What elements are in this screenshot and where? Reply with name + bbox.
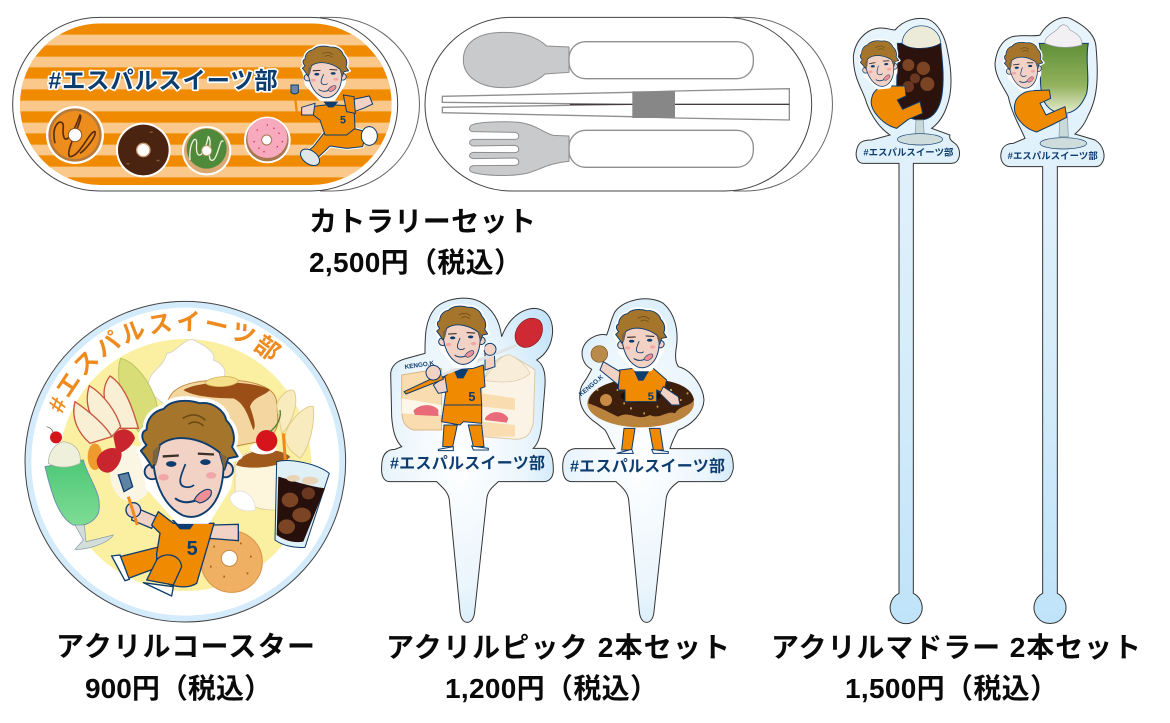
illustration: pancakes [168, 377, 278, 447]
case back outline [733, 17, 832, 191]
panel: cutlery case interior [425, 17, 832, 191]
illustration: player hugging glass [1002, 40, 1067, 132]
coaster curved title: #エスパルスイーツ部 [49, 310, 282, 414]
icon: chocolate donut [116, 123, 171, 177]
muddler label: #エスパルスイーツ部 [1008, 150, 1098, 161]
case title: #エスパルスイーツ部 [48, 68, 278, 94]
case front outline [13, 17, 398, 191]
illustration: seated player: 5 [187, 538, 198, 560]
pick outline [563, 299, 733, 622]
icon: spoon [463, 32, 753, 88]
illustration: player with fork [404, 305, 543, 451]
label: cutlery set [309, 206, 536, 278]
panel: cake acrylic pick [382, 298, 553, 622]
icon: fork [469, 122, 753, 176]
label: acrylic picks [386, 632, 730, 704]
panel: cutlery case lid [13, 17, 419, 191]
muddler outline [853, 18, 959, 624]
illustration: player in donut float: 5 [648, 391, 654, 403]
label: acrylic picks: アクリルピック 2本セット [386, 632, 730, 663]
yellow backdrop [59, 339, 311, 591]
illustration: seated player [112, 399, 240, 596]
coaster disc [25, 301, 346, 622]
panel: donut acrylic pick [563, 299, 733, 622]
illustration: strawberry shortcake [402, 355, 535, 439]
pick label: #エスパルスイーツ部 [570, 457, 725, 475]
icon: chopsticks [442, 89, 789, 120]
label: acrylic muddlers: アクリルマドラー 2本セット [771, 632, 1141, 663]
icon: caramel donut [46, 106, 104, 164]
icon: strawberry donut [244, 117, 291, 163]
pick outline [382, 298, 553, 622]
illustration: whipped cream [148, 340, 225, 403]
panel: acrylic coaster [24, 300, 346, 622]
illustration: melon and apple slices [74, 358, 157, 502]
illustration: bagel donut [201, 531, 262, 592]
illustration: player in donut float: KENGO.K [578, 374, 605, 398]
muddler outline [995, 18, 1104, 624]
illustration: bananas [277, 390, 314, 458]
illustration: pudding with cherry [230, 410, 290, 511]
label: acrylic coaster: アクリルコースター [56, 631, 315, 662]
panel: muddler matcha float [995, 18, 1104, 624]
case front outline [425, 17, 812, 191]
illustration: running player: 5 [340, 114, 346, 126]
illustration: running player [291, 45, 377, 169]
illustration: cream soda [45, 427, 113, 549]
label: cutlery set: カトラリーセット [309, 206, 536, 237]
label: acrylic picks: 1,200円（税込） [445, 673, 658, 704]
label: acrylic coaster: 900円（税込） [85, 673, 272, 704]
illustration: player in donut float [578, 309, 694, 453]
illustration: matcha float glass [1039, 25, 1088, 149]
illustration: player with fork: KENGO.K [404, 360, 435, 371]
pick label: #エスパルスイーツ部 [390, 454, 545, 472]
illustration: player with fork: 5 [468, 390, 475, 404]
orange striped background [20, 23, 392, 185]
panel: muddler coffee float [853, 18, 959, 624]
label: cutlery set: 2,500円（税込） [309, 247, 522, 278]
icon: matcha donut [182, 126, 231, 175]
label: acrylic coaster [56, 631, 315, 704]
label: acrylic muddlers [771, 632, 1141, 704]
muddler label: #エスパルスイーツ部 [863, 147, 954, 158]
illustration: coffee float glass [897, 26, 943, 145]
case back outline [320, 17, 419, 191]
label: acrylic muddlers: 1,500円（税込） [845, 673, 1058, 704]
illustration: player hugging glass [857, 38, 923, 128]
illustration: iced coffee [275, 433, 329, 548]
